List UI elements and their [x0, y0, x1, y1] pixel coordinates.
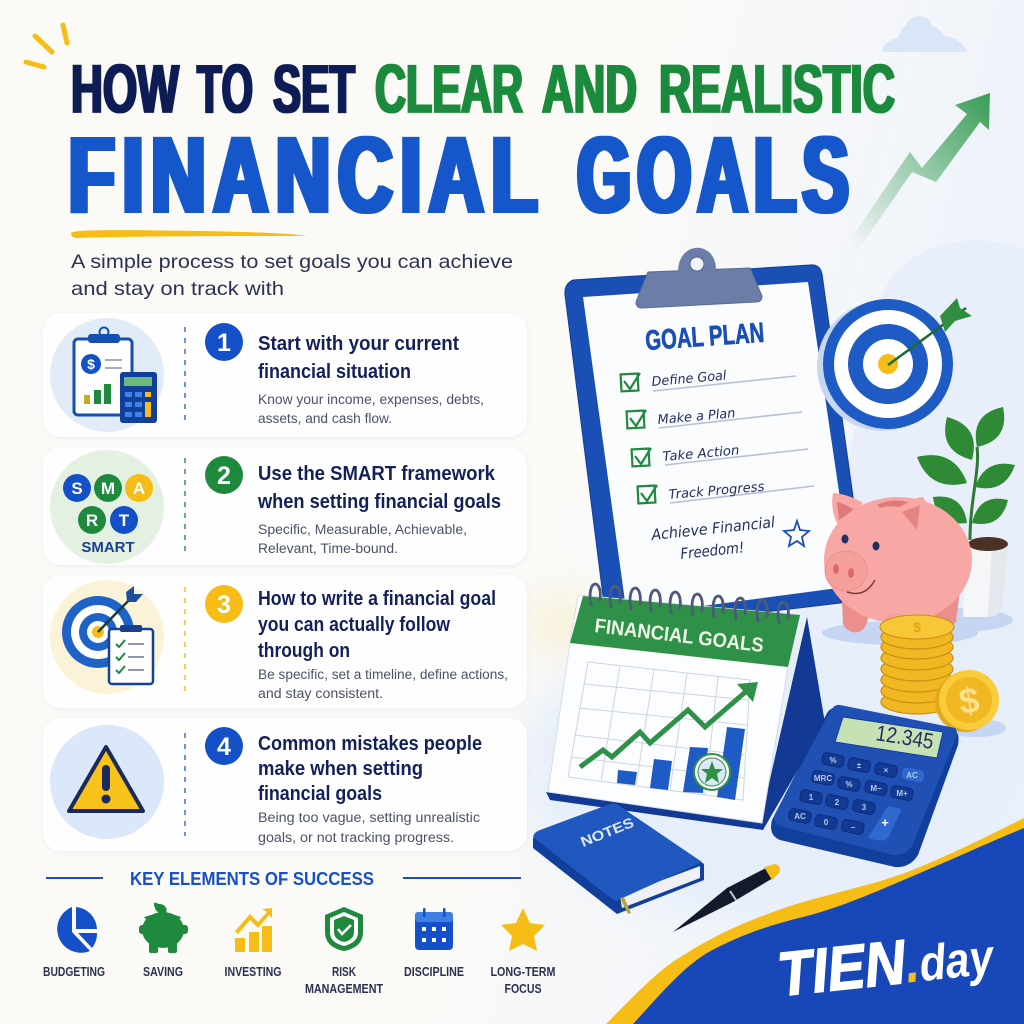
subtitle — [71, 251, 513, 300]
heading: How to write a financial goal — [258, 587, 496, 610]
checklist: Make a Plan — [657, 406, 736, 428]
title underline swoosh — [71, 230, 307, 238]
calculator keys: 1 — [809, 793, 814, 802]
description: Specific, Measurable, Achievable, — [258, 522, 467, 537]
heading — [258, 332, 459, 383]
front coin: $ — [956, 679, 982, 722]
calculator screen — [835, 717, 943, 758]
icon: cloud — [882, 16, 967, 52]
icon: long-term focus star — [501, 908, 545, 951]
heading: make when setting — [258, 757, 423, 780]
calculator keys: AC — [794, 812, 806, 821]
description — [258, 667, 508, 701]
brand logo: TIEN — [774, 928, 910, 1010]
calculator keys: % — [829, 756, 837, 765]
clipboard closing note: Freedom! — [680, 538, 745, 563]
icon: SMART circles: A — [133, 479, 145, 498]
calculator keys: % — [845, 780, 853, 789]
description — [258, 392, 484, 426]
number badge 2 — [205, 456, 243, 494]
calculator keys: MRC — [814, 774, 832, 783]
calculator screen: 12.345 — [874, 720, 935, 754]
icon: discipline calendar — [415, 908, 453, 950]
title: AND — [542, 51, 637, 128]
calculator keys: M+ — [896, 789, 908, 798]
illustration: clipboard — [565, 248, 866, 630]
description: Being too vague, setting unrealistic — [258, 810, 480, 825]
icon: investing chart — [235, 908, 272, 952]
calculator keys: M− — [870, 784, 882, 793]
title: REALISTIC — [659, 51, 895, 128]
heading: Start with your current — [258, 332, 459, 355]
heading: when setting financial goals — [257, 490, 501, 513]
calendar title: FINANCIAL GOALS — [593, 615, 765, 657]
title: GOALS — [577, 116, 855, 236]
icon: warning triangle — [50, 725, 164, 839]
title: FINANCIAL — [69, 115, 545, 235]
label: long-term focus: LONG-TERM — [490, 965, 556, 979]
icon: SMART circles: M — [101, 479, 115, 498]
number badge 4 — [205, 727, 243, 765]
brand banner — [606, 818, 1024, 1024]
icon: rising arrow — [850, 93, 990, 250]
number badge 2: 2 — [217, 462, 231, 490]
illustration: piggy bank — [822, 493, 978, 645]
calculator keys: AC — [906, 771, 918, 780]
illustration: pen — [673, 864, 780, 932]
illustration: target with arrow — [817, 298, 972, 431]
panel: step 4 — [43, 718, 527, 851]
brand logo — [774, 919, 998, 1010]
title — [69, 51, 895, 236]
subtitle: and stay on track with — [71, 278, 284, 300]
description — [258, 522, 467, 556]
calendar bars — [617, 727, 745, 800]
label: saving: SAVING — [143, 965, 183, 979]
title: HOW — [71, 51, 180, 128]
number badge 1: 1 — [217, 329, 231, 357]
label: long-term focus — [490, 965, 556, 996]
clipboard closing note: Achieve Financial — [650, 513, 777, 544]
number badge 4: 4 — [217, 733, 231, 761]
heading: you can actually follow — [258, 613, 450, 636]
checklist: Take Action — [662, 443, 740, 465]
calculator keys: 0 — [824, 818, 829, 827]
label: investing: INVESTING — [224, 965, 282, 979]
panel: step 2 — [43, 447, 527, 565]
illustration: calculator — [771, 705, 959, 867]
title: SET — [273, 51, 355, 128]
brand logo: . — [902, 926, 923, 997]
panel: step 1 — [43, 313, 527, 437]
heading: Common mistakes people — [258, 732, 482, 755]
panel: step 3 — [43, 575, 527, 708]
icon: SMART circles: SMART — [81, 539, 135, 556]
calculator keys — [788, 752, 925, 841]
subtitle: A simple process to set goals you can achieve — [71, 251, 513, 273]
description: assets, and cash flow. — [258, 411, 392, 426]
description: and stay consistent. — [258, 686, 383, 701]
checklist: Track Progress — [668, 480, 765, 503]
number badge 1 — [205, 323, 243, 361]
title: CLEAR — [375, 51, 523, 128]
heading: financial situation — [258, 360, 411, 383]
icon: sparkle marks — [26, 25, 67, 67]
calculator keys: − — [851, 823, 856, 832]
clipboard clip — [636, 248, 762, 308]
calendar growth arrow — [580, 688, 750, 767]
title: TO — [197, 51, 253, 128]
heading: through on — [258, 639, 350, 662]
calculator keys: 3 — [862, 803, 867, 812]
heading — [258, 732, 482, 805]
icon: clipboard and calculator: $ — [87, 356, 95, 372]
number badge 3: 3 — [217, 591, 231, 619]
number badge 3 — [205, 585, 243, 623]
heading — [257, 462, 501, 513]
description: Be specific, set a timeline, define actions, — [258, 667, 508, 682]
clipboard closing note — [650, 513, 777, 563]
icon: clipboard and calculator — [50, 318, 164, 432]
icon: risk shield — [325, 907, 363, 951]
icon: target and checklist — [50, 580, 164, 694]
heading: key elements: KEY ELEMENTS OF SUCCESS — [130, 869, 374, 889]
calculator keys: × — [884, 766, 889, 775]
clipboard title: GOAL PLAN — [644, 317, 765, 356]
label: budgeting: BUDGETING — [43, 965, 105, 979]
heading: financial goals — [258, 782, 382, 805]
calendar star badge — [694, 754, 730, 790]
label: risk management — [305, 965, 383, 996]
label: discipline: DISCIPLINE — [404, 965, 464, 979]
calculator keys: + — [881, 815, 889, 830]
heading: Use the SMART framework — [258, 462, 496, 485]
illustration: notes book: NOTES — [578, 814, 636, 850]
illustration: desk calendar — [546, 584, 825, 830]
calendar rings — [590, 584, 788, 623]
label: risk management: RISK — [332, 965, 356, 979]
illustration: notes book — [533, 803, 704, 914]
icon: SMART circles: T — [119, 511, 130, 530]
icon: SMART circles: S — [71, 479, 83, 498]
icon: SMART circles — [50, 450, 164, 564]
icon: budgeting pie — [57, 907, 97, 953]
label: long-term focus: FOCUS — [504, 982, 542, 996]
brand logo: day — [917, 928, 998, 992]
calculator keys: 2 — [835, 798, 840, 807]
description: Relevant, Time-bound. — [258, 541, 398, 556]
illustration: potted plant — [897, 407, 1015, 632]
calendar grid — [568, 662, 750, 800]
icon: saving pig — [139, 903, 188, 953]
description — [258, 810, 480, 845]
checklist: Define Goal — [651, 368, 727, 390]
calculator keys: ± — [857, 761, 862, 770]
illustration: coin stack: $ — [913, 619, 921, 635]
label: risk management: MANAGEMENT — [305, 982, 383, 996]
description: Know your income, expenses, debts, — [258, 392, 484, 407]
description: goals, or not tracking progress. — [258, 830, 454, 845]
checklist — [621, 368, 814, 503]
icon: outline star — [784, 521, 809, 546]
icon: SMART circles: R — [86, 511, 98, 530]
heading — [258, 587, 496, 662]
illustration: coin stack — [880, 615, 1006, 737]
